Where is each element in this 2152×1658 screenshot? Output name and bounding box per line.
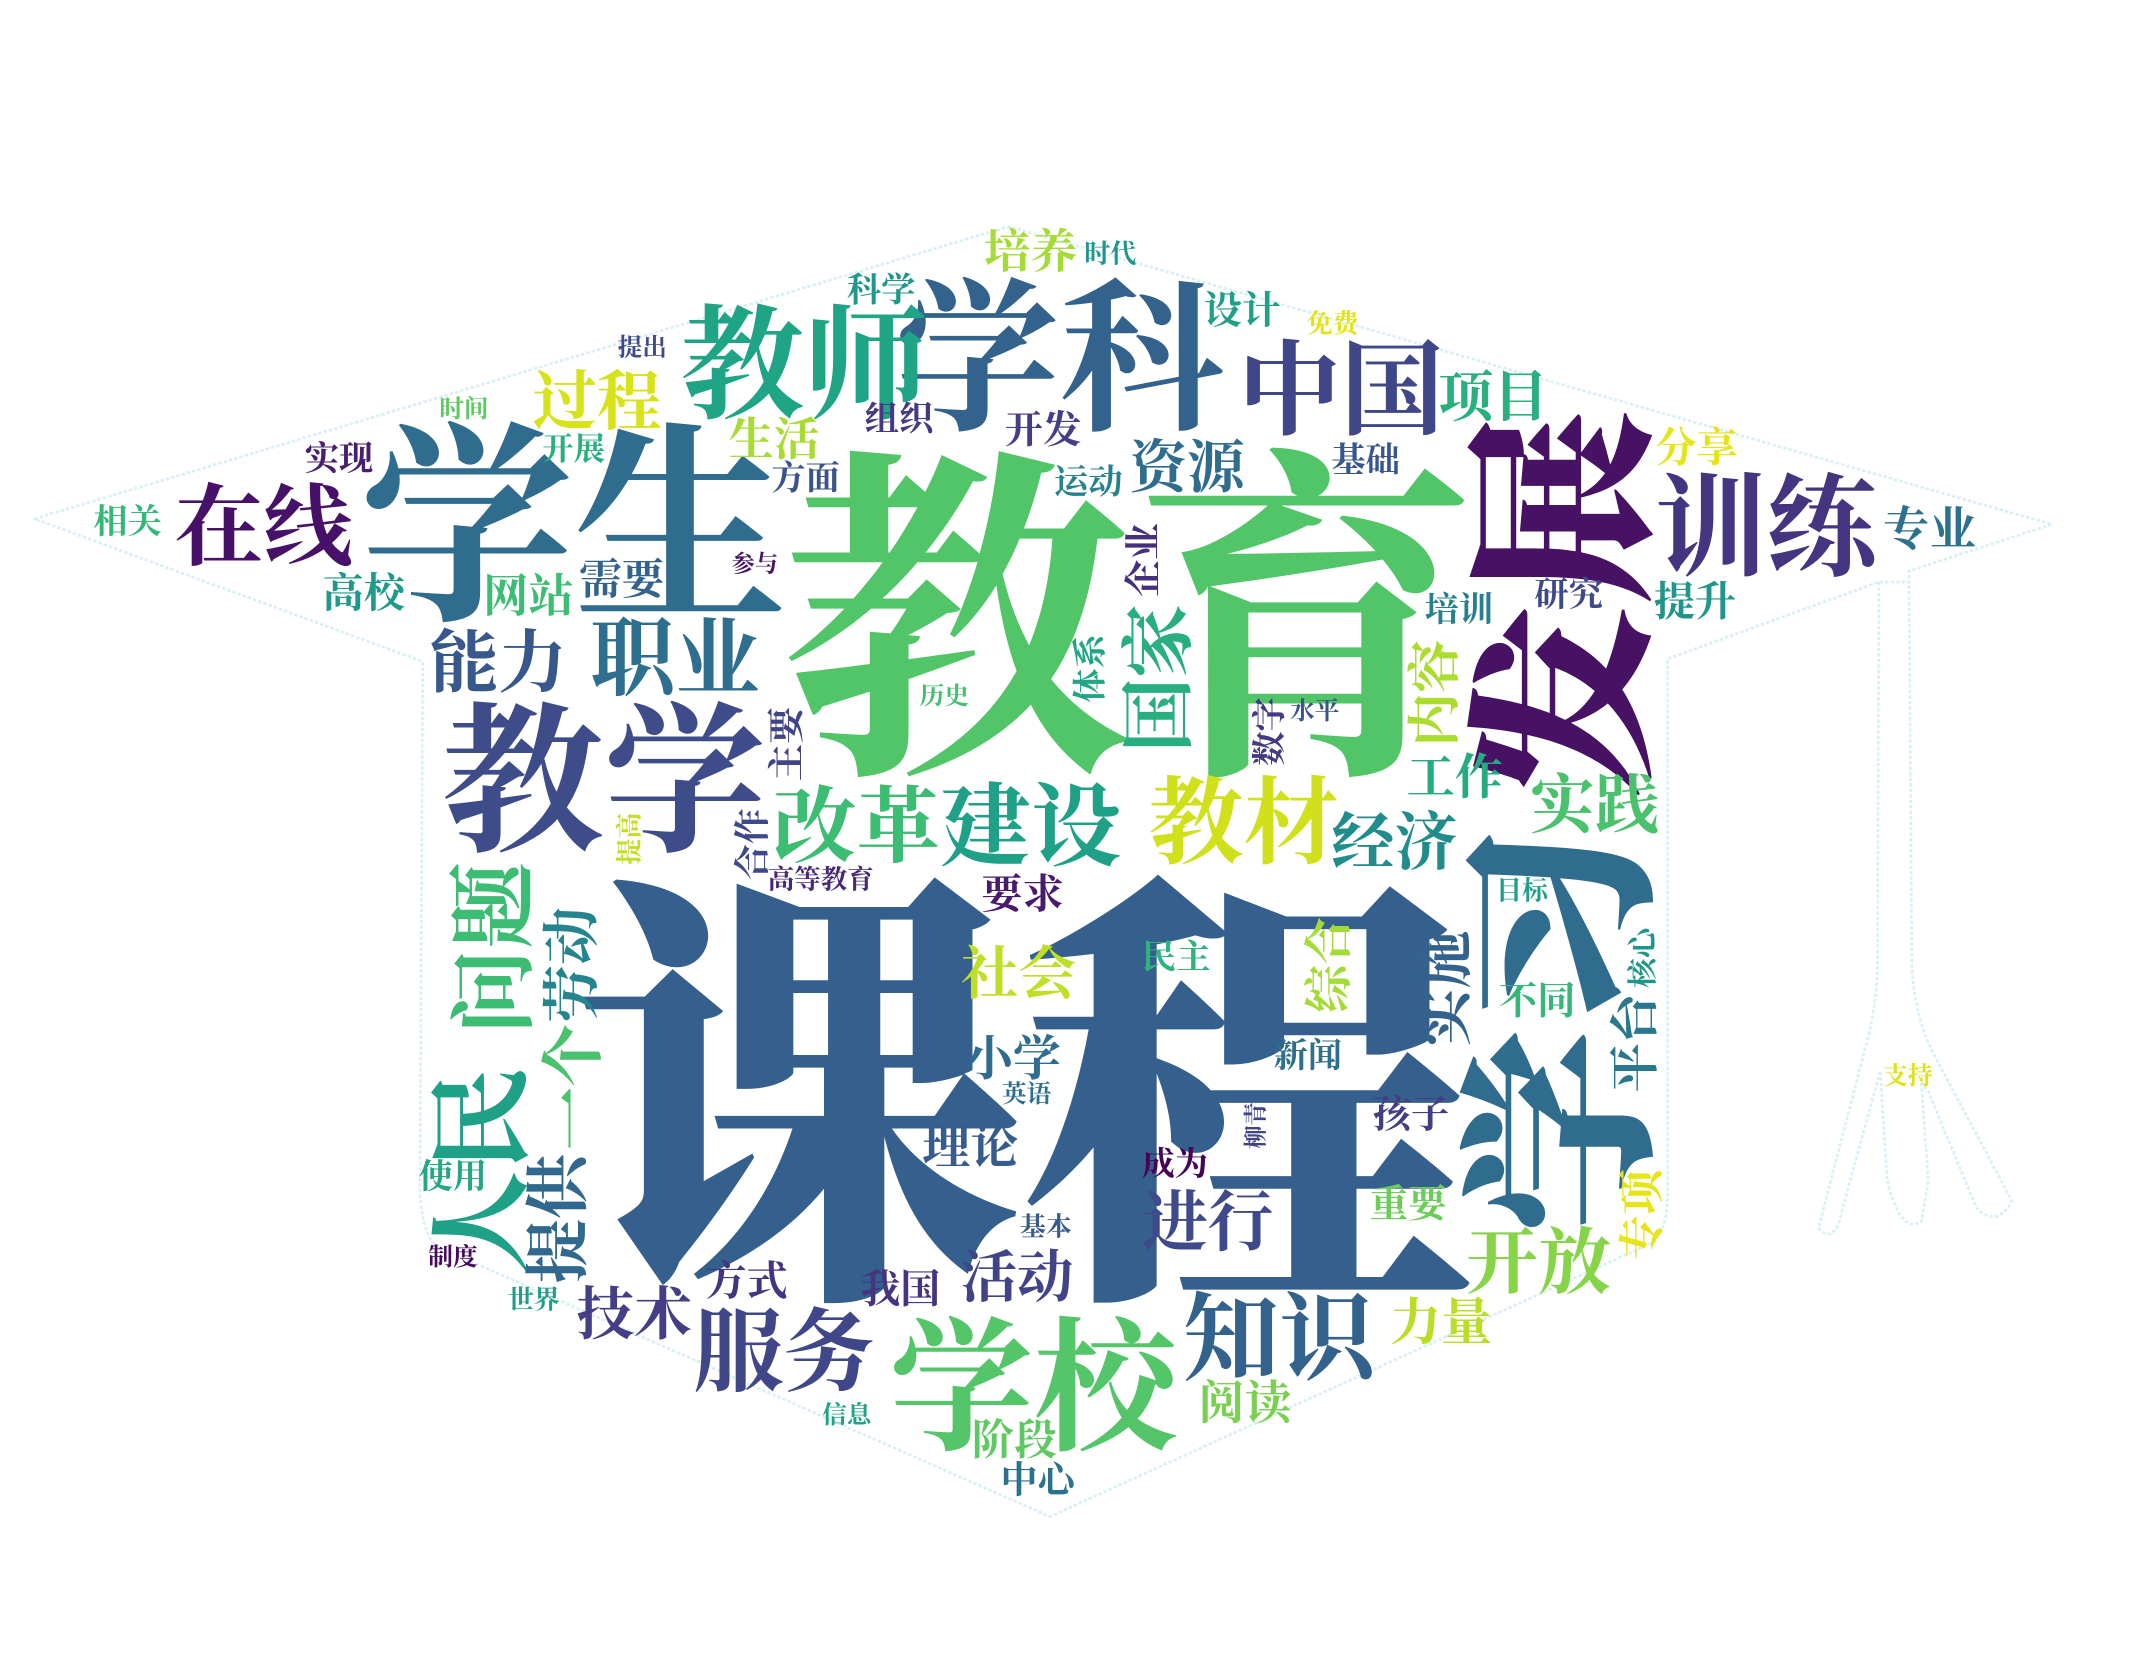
- word: 阶段: 阶段: [972, 1418, 1057, 1465]
- word: 学生: 学生: [360, 413, 788, 650]
- word: 网站: 网站: [483, 572, 574, 622]
- word: 资源: 资源: [1130, 436, 1248, 500]
- word: 发展: 发展: [1460, 410, 1676, 800]
- word: 基础: 基础: [1331, 441, 1400, 479]
- word: 不同: 不同: [1499, 981, 1576, 1023]
- word: 科学: 科学: [847, 271, 915, 309]
- word: 技术: 技术: [576, 1284, 692, 1347]
- word: 教学: 教学: [442, 695, 766, 874]
- word: 高校: 高校: [323, 570, 408, 616]
- word: 柳青: 柳青: [1242, 1102, 1269, 1149]
- word: 开展: 开展: [542, 431, 605, 466]
- word: 研究: 研究: [1534, 576, 1603, 614]
- word: 建设: 建设: [940, 777, 1121, 878]
- word: 企业: 企业: [1123, 523, 1165, 597]
- word: 孩子: 孩子: [1372, 1094, 1449, 1137]
- word: 水平: 水平: [1290, 697, 1340, 725]
- word: 课程: 课程: [572, 859, 1473, 1357]
- word: 分享: 分享: [1655, 425, 1738, 471]
- word: 方式: 方式: [705, 1258, 788, 1304]
- word: 制度: 制度: [428, 1242, 478, 1271]
- graduation cap outline: [34, 226, 2052, 1517]
- word: 活动: 活动: [961, 1247, 1073, 1309]
- word: 问题: 问题: [447, 862, 543, 1035]
- word: 高等教育: 高等教育: [768, 864, 874, 894]
- word: 能力: 能力: [430, 625, 567, 701]
- word: 参与: 参与: [732, 551, 778, 578]
- word: 理论: 理论: [922, 1121, 1018, 1174]
- word: 项目: 项目: [1438, 367, 1548, 428]
- word: 人民: 人民: [426, 1066, 542, 1275]
- word: 生活: 生活: [729, 415, 819, 465]
- word: 方面: 方面: [771, 459, 840, 497]
- word: 相关: 相关: [93, 503, 162, 541]
- word: 教材: 教材: [1149, 772, 1338, 876]
- word: 合作: 合作: [732, 808, 772, 880]
- word: 阅读: 阅读: [1198, 1378, 1293, 1430]
- word: 经济: 经济: [1331, 808, 1458, 878]
- word: 历史: 历史: [920, 682, 969, 710]
- word: 提升: 提升: [1654, 578, 1736, 624]
- word: 内容: 内容: [1405, 640, 1465, 747]
- word: 提出: 提出: [618, 333, 667, 361]
- word: 设计: 设计: [1204, 289, 1280, 332]
- word: 训练: 训练: [1655, 469, 1886, 592]
- word: 世界: 世界: [508, 1285, 560, 1314]
- word: 信息: 信息: [822, 1401, 874, 1429]
- word: 知识: 知识: [1183, 1286, 1383, 1393]
- word: 专业: 专业: [1883, 504, 1976, 556]
- word: 服务: 服务: [693, 1303, 874, 1404]
- word: 改革: 改革: [773, 781, 940, 874]
- word: 目标: 目标: [1496, 875, 1550, 905]
- word: 新闻: 新闻: [1274, 1037, 1342, 1075]
- word: 平台: 平台: [1608, 992, 1663, 1092]
- word: 国家: 国家: [1119, 604, 1201, 752]
- word: 免费: 免费: [1307, 309, 1361, 338]
- word: 需要: 需要: [579, 557, 666, 604]
- word: 实践: 实践: [1530, 770, 1659, 841]
- word: 教师: 教师: [681, 298, 928, 435]
- word: 实现: 实现: [305, 440, 373, 478]
- word: 过程: 过程: [533, 367, 662, 438]
- word: 要求: 要求: [981, 871, 1064, 917]
- word: 主要: 主要: [766, 706, 808, 781]
- word: 一个: 一个: [539, 1024, 609, 1150]
- word: 英语: 英语: [1002, 1080, 1052, 1108]
- word: 教育: 教育: [782, 436, 1479, 822]
- word: 工作: 工作: [1407, 752, 1503, 805]
- word: 劳动: 劳动: [541, 907, 604, 1023]
- word: 民主: 民主: [1142, 938, 1210, 976]
- word: 时代: 时代: [1084, 239, 1136, 268]
- word: 核心: 核心: [1626, 924, 1660, 988]
- word: 专项: 专项: [1617, 1167, 1667, 1260]
- word: 数字: 数字: [1251, 697, 1289, 766]
- word: 我国: 我国: [861, 1268, 940, 1312]
- word: 小学: 小学: [965, 1033, 1061, 1086]
- word: 使用: 使用: [419, 1158, 487, 1196]
- word: 中心: 中心: [1001, 1459, 1080, 1501]
- word: 实施: 实施: [1414, 931, 1477, 1046]
- word: 社会: 社会: [961, 943, 1076, 1007]
- word: 培养: 培养: [984, 227, 1077, 279]
- word: 重要: 重要: [1370, 1183, 1448, 1226]
- word: 学科: 学科: [895, 270, 1224, 453]
- word: 开发: 开发: [1005, 409, 1081, 452]
- word: 培训: 培训: [1425, 591, 1493, 629]
- word: 开放: 开放: [1466, 1223, 1611, 1304]
- word: 学校: 学校: [889, 1311, 1187, 1470]
- word: 组织: 组织: [865, 400, 936, 438]
- word: 运动: 运动: [1054, 463, 1123, 501]
- word: 中国: 中国: [1238, 335, 1444, 449]
- word: 提供: 提供: [523, 1151, 594, 1283]
- word: 体系: 体系: [1071, 633, 1109, 703]
- word: 综合: 综合: [1303, 917, 1356, 1013]
- word: 力量: 力量: [1390, 1295, 1492, 1351]
- word: 成为: 成为: [1142, 1146, 1208, 1183]
- word: 支持: 支持: [1883, 1062, 1933, 1090]
- word: 基本: 基本: [1020, 1213, 1072, 1242]
- word: 职业: 职业: [590, 613, 760, 707]
- word: 学习: 学习: [1453, 826, 1678, 1232]
- word: 时间: 时间: [439, 395, 489, 423]
- word: 在线: 在线: [174, 480, 353, 578]
- word: 进行: 进行: [1142, 1187, 1274, 1260]
- word: 提高: 提高: [614, 813, 644, 865]
